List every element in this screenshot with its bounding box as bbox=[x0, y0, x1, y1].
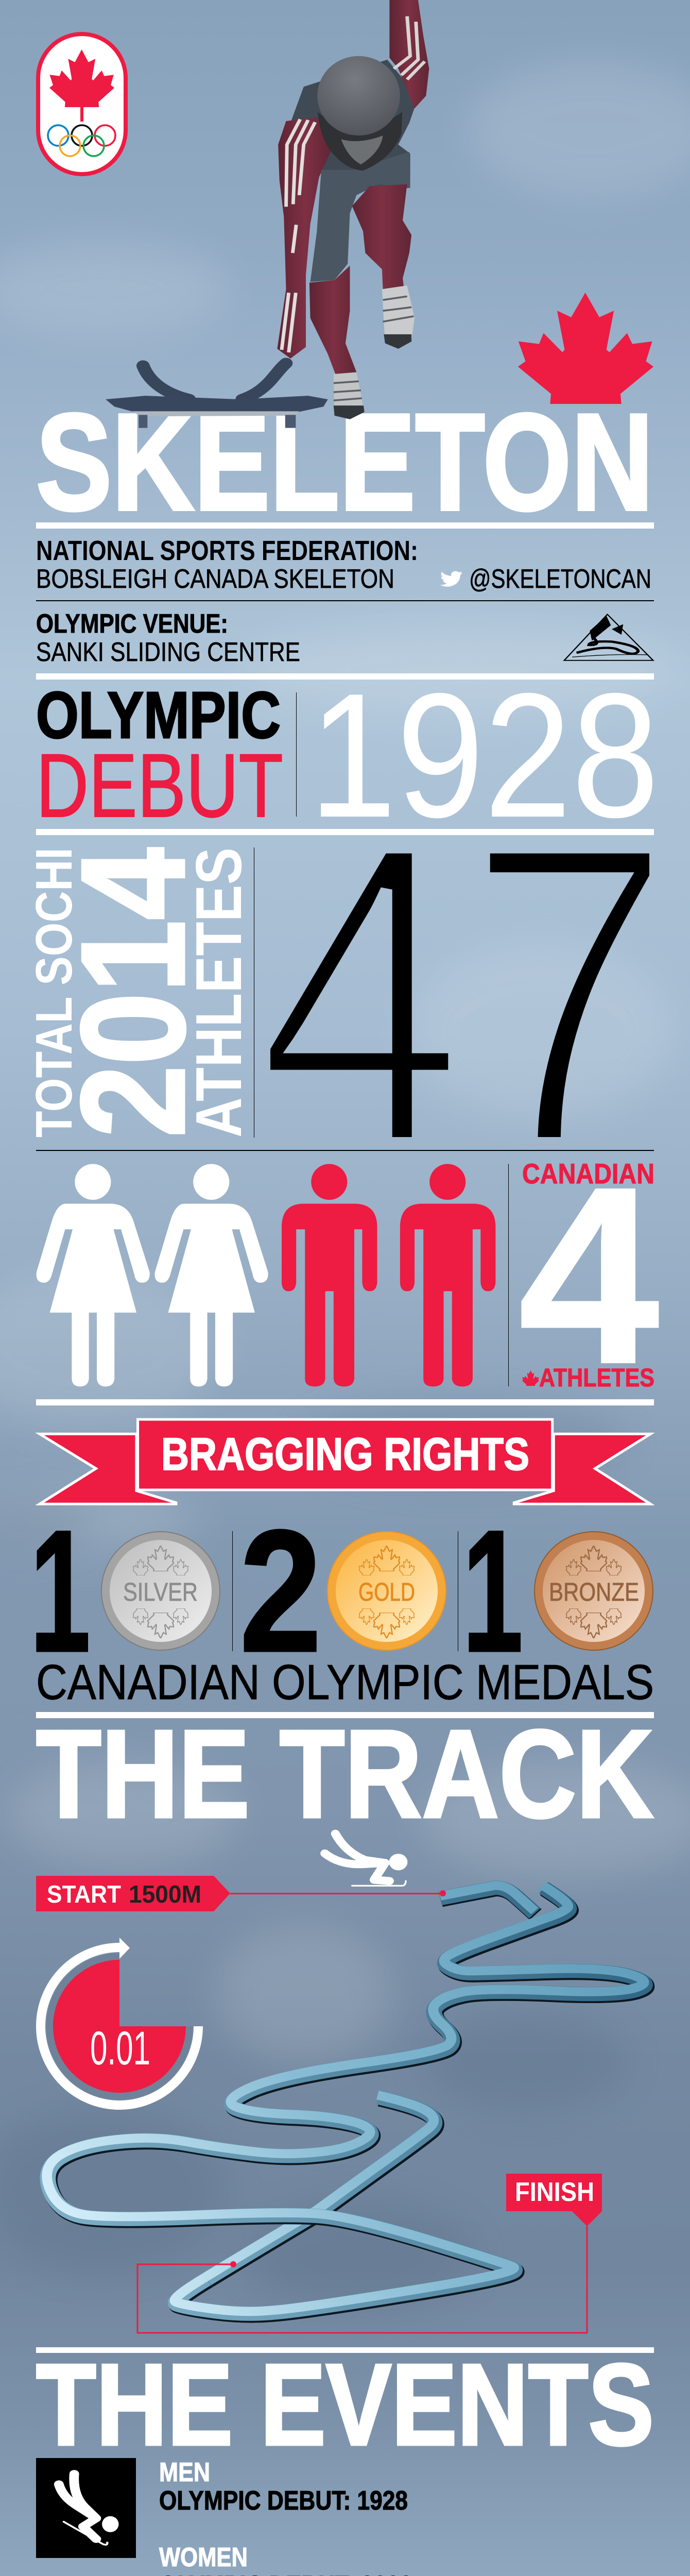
twitter handle: @SKELETONCAN bbox=[469, 564, 651, 594]
event debut text: WOMEN bbox=[159, 2543, 248, 2572]
gold medal bbox=[327, 1532, 446, 1650]
vertical label: total sochi 2014 athletes: 2014 bbox=[50, 846, 215, 1138]
canadian athletes count: 4 bbox=[518, 1134, 661, 1416]
bronze medal bbox=[534, 1532, 653, 1650]
olympic debut label bbox=[36, 679, 283, 836]
event debut text bbox=[159, 2458, 533, 2576]
vertical label: total sochi 2014 athletes bbox=[25, 846, 255, 1138]
text: national sports federation bbox=[36, 535, 418, 594]
text: olympic venue: OLYMPIC VENUE: bbox=[36, 609, 228, 639]
divider rule bbox=[36, 522, 654, 529]
silver count: 1 bbox=[30, 1494, 91, 1688]
bronze count: 1 bbox=[462, 1494, 523, 1688]
event debut text: OLYMPIC DEBUT: 1928 bbox=[159, 2486, 408, 2516]
Olympic team logo bbox=[38, 34, 126, 174]
text: national sports federation: NATIONAL SPORTS FEDERATION: bbox=[36, 535, 418, 566]
text: national sports federation: BOBSLEIGH CANADA SKELETON bbox=[36, 564, 394, 594]
start label with connector: START bbox=[47, 1881, 121, 1908]
icon: twitter bird bbox=[440, 571, 462, 587]
stopwatch pie bbox=[41, 1938, 198, 2105]
text: olympic venue: SANKI SLIDING CENTRE bbox=[36, 637, 300, 667]
banner: bragging rights bbox=[40, 1419, 650, 1504]
event debut text: MEN bbox=[159, 2458, 210, 2487]
olympic debut label: OLYMPIC bbox=[36, 679, 281, 752]
silver medal: SILVER bbox=[123, 1578, 198, 1606]
canadian athletes count: ATHLETES bbox=[539, 1363, 654, 1392]
gold medal: GOLD bbox=[358, 1578, 415, 1606]
vertical label: total sochi 2014 athletes: TOTAL SOCHI bbox=[25, 848, 83, 1138]
icon: black skeleton pictogram bbox=[36, 2458, 136, 2558]
finish label with connector: FINISH bbox=[515, 2177, 594, 2207]
banner: bragging rights: BRAGGING RIGHTS bbox=[161, 1428, 529, 1480]
medals row bbox=[30, 1494, 653, 1688]
bronze medal: BRONZE bbox=[549, 1578, 639, 1606]
gold count: 2 bbox=[239, 1494, 322, 1688]
athlete and sled photo bbox=[106, 0, 429, 428]
text: olympic venue bbox=[36, 609, 300, 667]
start label with connector bbox=[36, 1876, 446, 1911]
icon: large red maple leaf bbox=[518, 293, 653, 404]
olympic debut label: DEBUT bbox=[36, 736, 283, 836]
start label with connector: 1500M bbox=[129, 1881, 201, 1908]
icon: athlete lunge on sled bbox=[325, 1834, 407, 1886]
canadian athletes count: CANADIAN bbox=[522, 1158, 654, 1190]
vertical label: total sochi 2014 athletes: ATHLETES bbox=[182, 848, 255, 1138]
silver medal bbox=[101, 1532, 220, 1650]
stopwatch pie: 0.01 bbox=[90, 2022, 150, 2075]
track map bbox=[47, 1885, 646, 2315]
pictogram: two women and two men bbox=[37, 1164, 495, 1386]
icon: venue mountain bbox=[564, 614, 653, 660]
finish label with connector bbox=[137, 2174, 602, 2333]
